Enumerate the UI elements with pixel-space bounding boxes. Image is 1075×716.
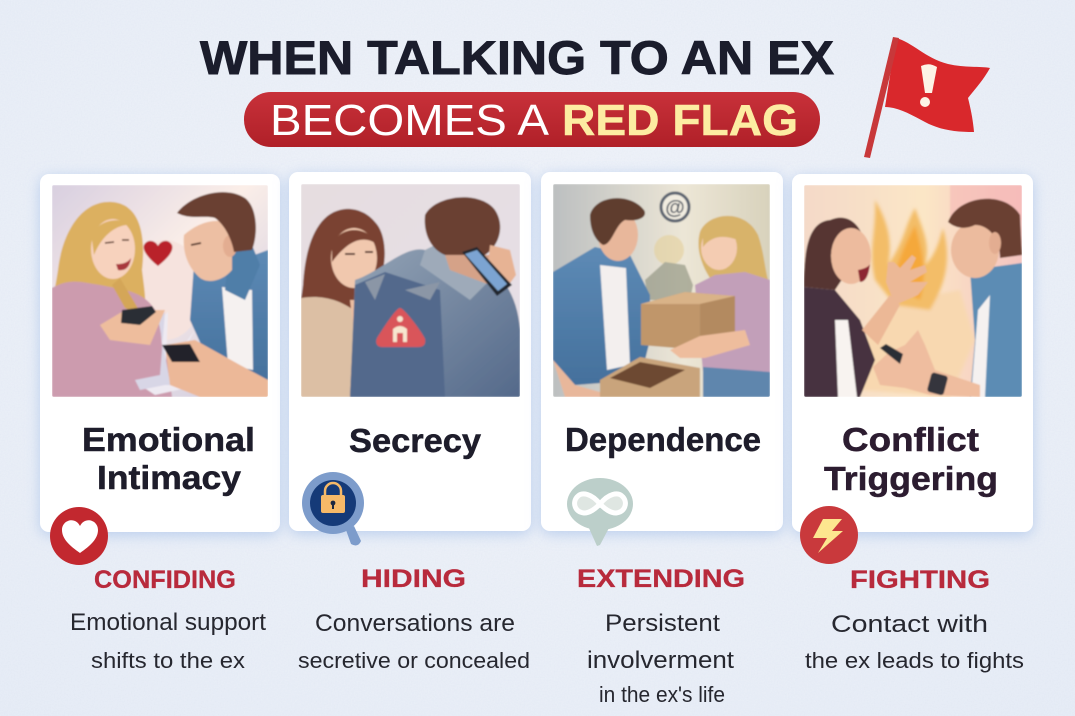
description: Conversations are [315,610,515,637]
icon: heart [50,507,108,565]
card [289,172,531,531]
description: Emotional support [70,609,266,636]
label: HIDING [361,565,466,593]
panel: dependence [541,172,783,707]
description: involverment [587,647,734,674]
heading: Conflict [842,421,979,458]
description: the ex leads to fights [805,648,1024,673]
title pill [244,92,820,147]
description [805,611,1024,673]
description: shifts to the ex [91,648,245,673]
heading: Secrecy [349,422,482,459]
card [792,174,1033,532]
title pill: RED FLAG [562,96,798,145]
heading [82,421,255,496]
icon: lightning bolt [800,506,858,564]
illustration: exchanging a box [553,184,770,397]
illustration: couple sharing phones [52,185,268,397]
title line 1: WHEN TALKING TO AN EX [200,31,834,84]
description [587,610,734,707]
description: Contact with [831,611,988,638]
icon: infinity bubble [567,478,633,546]
heading: Triggering [824,460,998,497]
heading: Intimacy [97,459,242,496]
heading: Dependence [565,421,761,458]
icon: magnifier lock [302,472,364,545]
card [40,174,280,532]
title pill: BECOMES A [270,96,550,145]
panel: emotional intimacy [40,174,280,673]
label: CONFIDING [94,566,236,594]
illustration: hidden phone call [301,184,520,397]
description: in the ex's life [599,682,725,707]
panel: secrecy [289,172,531,673]
label: FIGHTING [850,566,990,594]
description: secretive or concealed [298,648,530,673]
description: Persistent [605,610,720,637]
description [298,610,530,673]
icon: red flag [864,37,990,158]
card [541,172,783,531]
illustration: argument with flames [804,185,1022,397]
illustration: exchanging a box: @ [665,197,685,219]
title [200,31,834,147]
heading: Emotional [82,421,255,458]
label: EXTENDING [577,565,745,593]
heading [824,421,998,497]
description [70,609,266,673]
panel: conflict triggering [792,174,1033,673]
